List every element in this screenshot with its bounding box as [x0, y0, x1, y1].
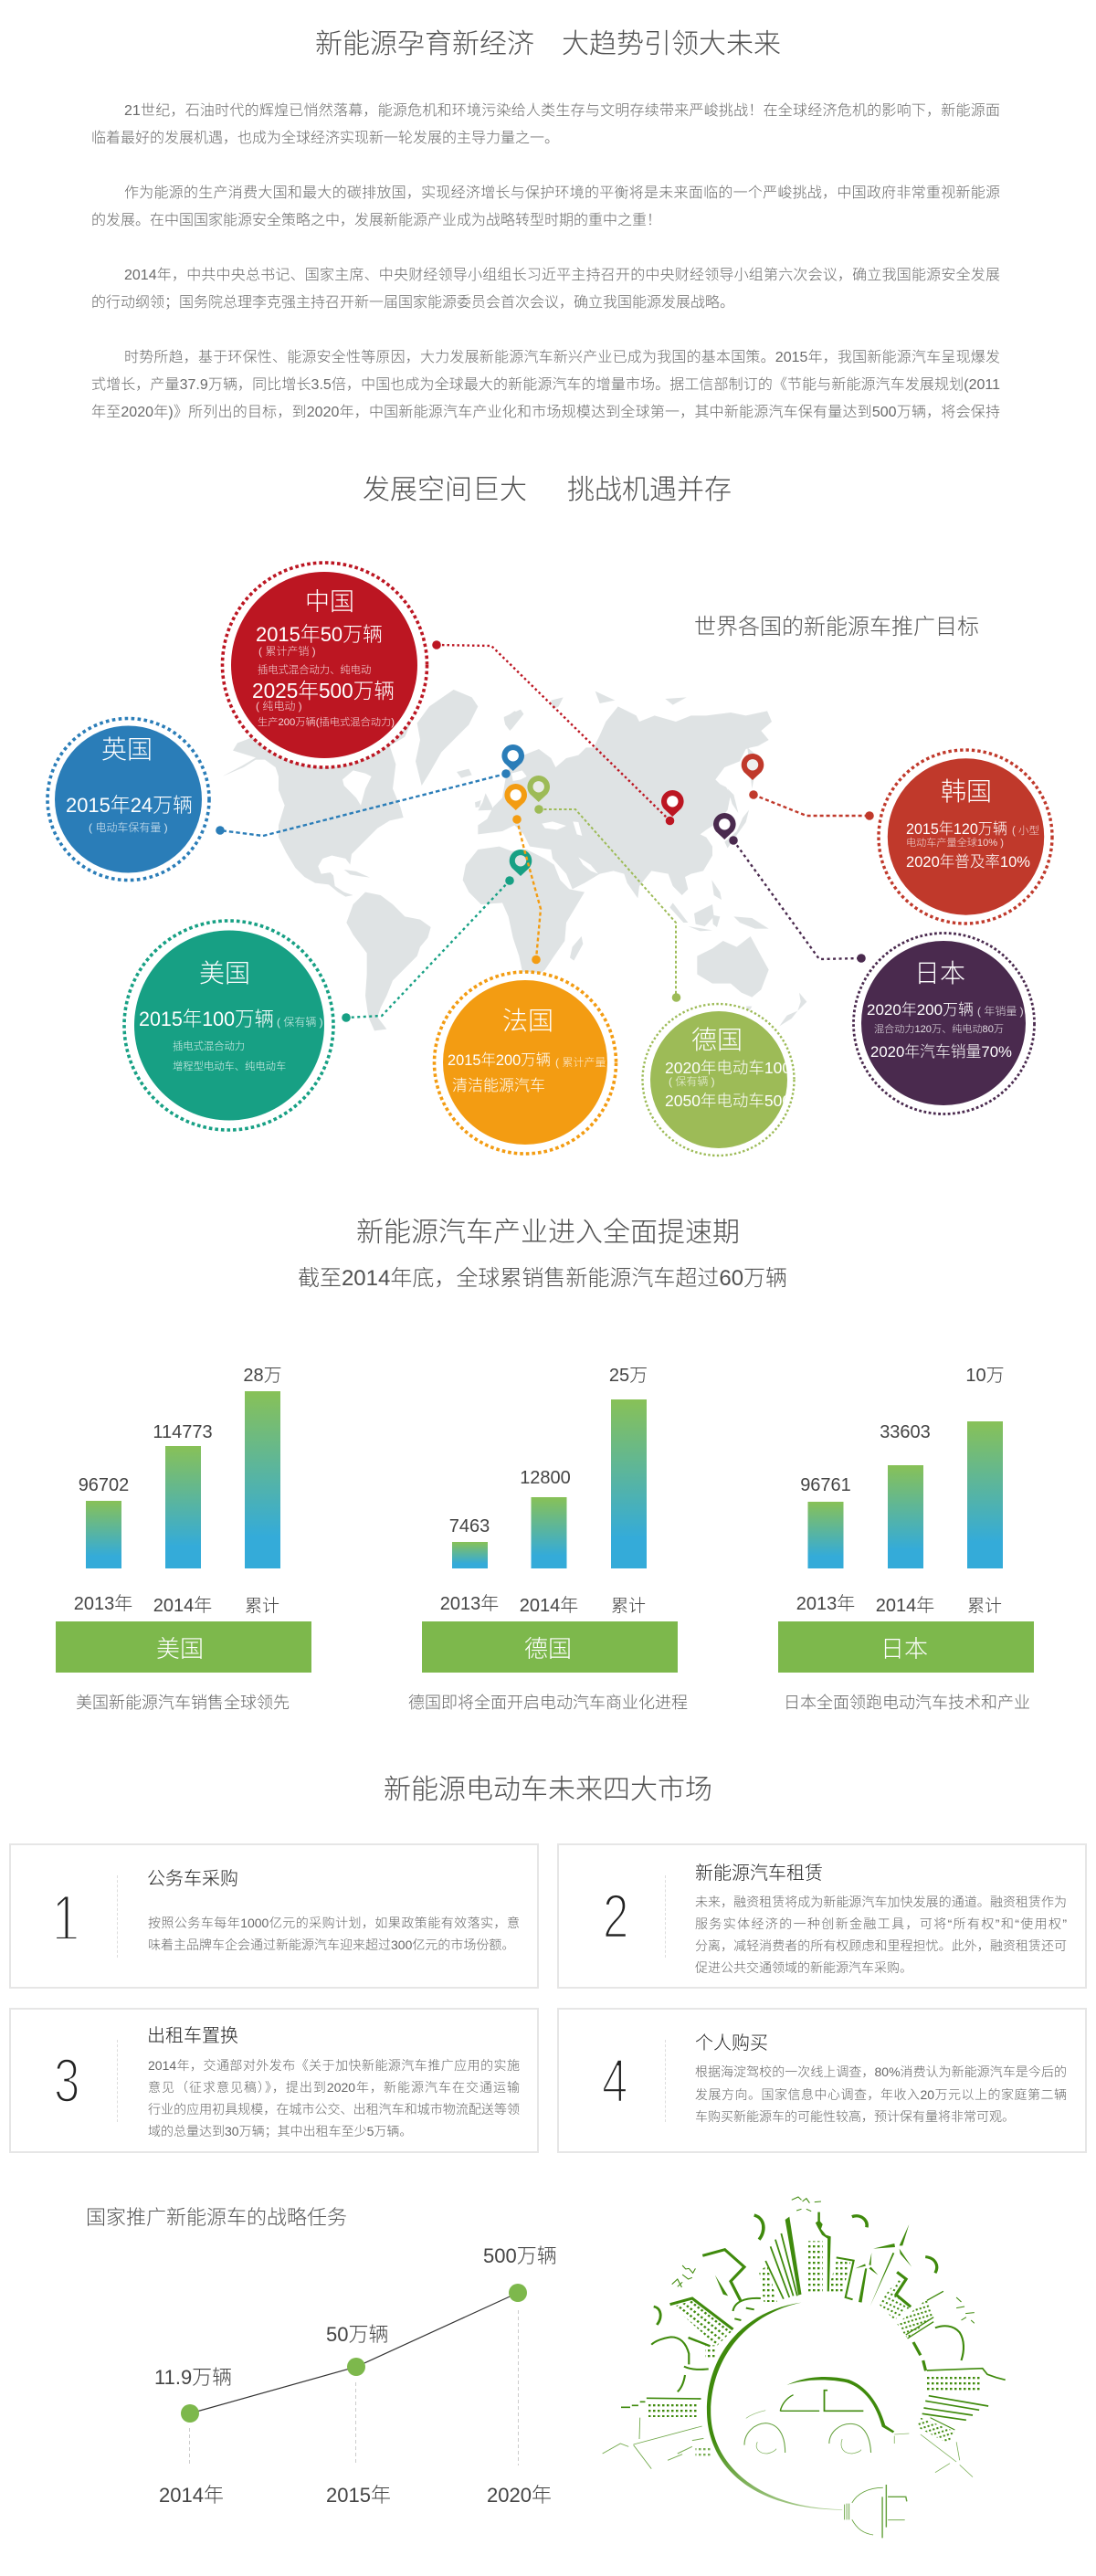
bar chart: USA: 2013年 — [74, 1593, 132, 1614]
number 4: 4 — [602, 2046, 627, 2116]
card title: 个人购买 — [695, 2033, 768, 2053]
connector: Korea — [749, 790, 874, 820]
bar chart: Germany — [440, 1366, 648, 1616]
circle: China: 插电式混合动力、纯电动 — [258, 664, 371, 676]
circle: France: 法国 — [502, 1007, 553, 1035]
bar chart: Germany: 12800 — [520, 1468, 571, 1488]
card 3 — [9, 2008, 539, 2153]
card text: 根据海淀驾校的一次线上调查，80%消费认为新能源汽车是今后的 — [695, 2064, 1067, 2079]
circle: China: ( 纯电动 ) — [256, 700, 302, 713]
pin: Germany — [527, 776, 550, 802]
intro text block: 的发展。在中国国家能源安全策略之中，发展新能源产业成为战略转型时期的重中之重！ — [91, 213, 661, 228]
pin: Korea — [742, 754, 764, 780]
circle: China: 中国 — [305, 588, 354, 616]
card title: 新能源汽车租赁 — [695, 1863, 823, 1884]
label bar: Germany: 德国 — [524, 1635, 572, 1663]
card text: 未来，融资租赁将成为新能源汽车加快发展的通道。融资租赁作为 — [695, 1895, 1067, 1909]
dotted tower — [897, 2291, 943, 2338]
map: Eurasia — [478, 706, 772, 898]
line chart: 50万辆 — [326, 2323, 388, 2346]
left turbine and buildings — [603, 2398, 711, 2469]
circle: UK: ( 电动车保有量 ) — [89, 821, 168, 834]
circle: France: 清洁能源汽车 — [452, 1077, 545, 1094]
top birds — [792, 2197, 821, 2212]
card 1 — [9, 1843, 539, 1989]
line chart — [154, 2244, 557, 2507]
card text: 发展方向。国家信息中心调查，年收入20万元以上的家庭第二辆 — [695, 2087, 1067, 2102]
circle: China — [223, 563, 427, 767]
plug — [845, 2485, 907, 2538]
circle: Korea: 2020年普及率10% — [906, 853, 1030, 871]
card text: 按照公务车每年1000亿元的采购计划，如果政策能有效落实，意 — [148, 1916, 520, 1930]
section heading: development space — [363, 475, 732, 505]
birds left — [672, 2265, 695, 2287]
circle: Germany: ( 保有辆 ) — [669, 1075, 715, 1088]
intro text block: 临着最好的发展机遇，也成为全球经济实现新一轮发展的主导力量之一。 — [91, 131, 559, 146]
circle: USA: 增程型电动车、纯电动车 — [173, 1061, 286, 1072]
circle: France — [435, 972, 616, 1154]
circle: Japan: 日本 — [914, 959, 965, 987]
card title: 出租车置换 — [147, 2026, 238, 2046]
bar chart: Japan: 2013年 — [796, 1593, 855, 1614]
card text: 2014年，交通部对外发布《关于加快新能源汽车推广应用的实施 — [148, 2058, 520, 2073]
intro text block: 年至2020年)》所列出的目标，到2020年，中国新能源汽车产业化和市场规模达到全球第一，其中新能源汽车保有量达到500万辆，将会保持 — [91, 405, 1000, 420]
intro text block: 21世纪，石油时代的辉煌已悄然落幕，能源危机和环境污染给人类生存与文明存续带来严峻挑战！在全球经济危机的影响下，新能源面 — [124, 103, 1000, 119]
circle: Korea — [879, 750, 1052, 924]
bar chart: Japan: 累计 — [967, 1596, 1002, 1616]
line chart: 2015年 — [326, 2484, 391, 2507]
bar chart: Germany: 累计 — [611, 1596, 646, 1616]
connector: UK — [216, 769, 511, 836]
circle: Korea: 电动车产量全球10% ) — [906, 836, 1004, 849]
label bar: Germany — [422, 1621, 678, 1673]
section heading: acceleration: 新能源汽车产业进入全面提速期 — [356, 1218, 740, 1248]
intro text block: 式增长，产量37.9万辆，同比增长3.5倍，中国也成为全球最大的新能源汽车的增量市场。据工信部制订的《节能与新能源汽车发展规划(2011 — [91, 377, 1000, 393]
bar chart: USA: 28万 — [243, 1366, 282, 1386]
circle: USA: 插电式混合动力 — [173, 1040, 245, 1052]
connector: China — [432, 640, 674, 825]
illustration: green city around electric car — [603, 2196, 1006, 2538]
circle: China: 2025年500万辆 — [252, 679, 395, 702]
right tree — [935, 2326, 964, 2360]
card text: 促进公共交通领域的新能源汽车采购。 — [695, 1960, 912, 1975]
right turbine — [921, 2434, 973, 2477]
bar chart: Japan: 96761 — [800, 1475, 851, 1495]
caption: Germany: 德国即将全面开启电动汽车商业化进程 — [408, 1694, 688, 1712]
chart title: 国家推广新能源车的战略任务 — [86, 2206, 347, 2229]
world map — [222, 690, 806, 1030]
intro text block: 时势所趋，基于环保性、能源安全性等原因，大力发展新能源汽车新兴产业已成为我国的基本国策。2015年，我国新能源汽车呈现爆发 — [124, 350, 1000, 365]
circle: Japan — [853, 934, 1034, 1114]
line chart: 11.9万辆 — [154, 2366, 232, 2389]
pin: USA — [510, 850, 532, 876]
intro text block: 的行动纲领；国务院总理李克强主持召开新一届国家能源委员会首次会议，确立我国能源发展战略。 — [91, 295, 734, 311]
number 3: 3 — [54, 2046, 79, 2116]
card text: 域的总量达到30万辆；其中出租车至少5万辆。 — [148, 2124, 412, 2138]
card 4 — [557, 2008, 1087, 2153]
connector: Japan — [729, 836, 866, 963]
section heading: development space: 挑战机遇并存 — [567, 475, 732, 505]
card text: 味着主品牌车企会通过新能源汽车迎来超过300亿元的市场份额。 — [148, 1937, 514, 1952]
upper left cloud — [754, 2215, 764, 2240]
map: Africa — [463, 847, 585, 979]
card text — [148, 2058, 520, 2138]
pin: UK — [501, 744, 524, 771]
circle: Japan: 2020年200万辆 — [867, 1001, 974, 1019]
building with square windows — [878, 2272, 911, 2320]
bar chart: USA: 96702 — [79, 1475, 129, 1495]
line chart section — [86, 2206, 557, 2507]
card text: 服务实体经济的一种创新金融工具，可将“所有权”和“使用权” — [695, 1916, 1067, 1931]
label bar: Japan — [778, 1621, 1034, 1673]
circle: Korea: 韩国 — [941, 777, 992, 806]
bar chart: USA — [74, 1366, 282, 1616]
card text: 分离，减轻消费者的所有权顾虑和里程担忧。此外，融资租赁还可 — [695, 1938, 1067, 1953]
circle: Germany — [641, 1003, 796, 1156]
bar chart: Japan: 2014年 — [876, 1595, 934, 1616]
pin: China — [661, 790, 684, 817]
card title: 公务车采购 — [147, 1869, 238, 1889]
electric car — [744, 2377, 909, 2454]
circle: UK: 英国 — [101, 735, 153, 764]
line chart: 2020年 — [487, 2484, 552, 2507]
bar charts section — [56, 1366, 1034, 1712]
intro text block: 作为能源的生产消费大国和最大的碳排放国，实现经济增长与保护环境的平衡将是未来面临的一个严峻挑战，中国政府非常重视新能源 — [124, 185, 1000, 201]
circle: France: ( 累计产量 ) — [555, 1056, 613, 1069]
right buildings — [917, 2369, 1006, 2444]
circle: Germany: 2050年电动车500万辆 — [665, 1092, 823, 1110]
card text: 车购买新能源车的可能性较高，预计保有量将非常可观。 — [695, 2109, 1015, 2124]
slanted dotted building — [670, 2298, 732, 2360]
connector: Germany — [534, 805, 680, 1002]
bar chart: Japan — [796, 1366, 1005, 1616]
circle: USA: ( 保有辆 ) — [277, 1016, 323, 1029]
circle: China: 生产200万辆(插电式混合动力) — [258, 716, 395, 728]
label bar: USA: 美国 — [156, 1635, 204, 1663]
caption: Japan: 日本全面领跑电动汽车技术和产业 — [784, 1694, 1030, 1712]
map subtitle: 世界各国的新能源车推广目标 — [694, 615, 979, 639]
bar chart: USA: 累计 — [245, 1596, 279, 1616]
bar chart: Germany: 7463 — [449, 1516, 490, 1536]
line chart: 2014年 — [159, 2484, 224, 2507]
L-shaped building and tree — [702, 2250, 761, 2320]
title: 新能源孕育新经济 大趋势引领大未来 — [315, 29, 781, 59]
right birds — [956, 2297, 975, 2323]
pin: Japan — [713, 813, 736, 839]
circle: France: 2015年200万辆 — [448, 1051, 551, 1069]
bar chart: USA: 2014年 — [153, 1595, 212, 1616]
central skyscrapers — [759, 2212, 854, 2302]
bar chart: USA: 114773 — [153, 1422, 213, 1442]
bar chart: Japan: 10万 — [965, 1366, 1005, 1386]
circle: Japan: 2020年汽车销量70% — [870, 1043, 1012, 1061]
circle: China: 2015年50万辆 — [256, 623, 383, 646]
card text — [695, 2064, 1067, 2124]
circle: Korea: 2015年120万辆 — [906, 820, 1007, 838]
map: Scandinavia and Britain — [475, 793, 493, 810]
circle: China: ( 累计产销 ) — [258, 645, 316, 658]
circle: UK — [47, 718, 209, 881]
map: Americas and Greenland — [222, 690, 523, 1030]
section subheading: 截至2014年底，全球累销售新能源汽车超过60万辆 — [298, 1266, 787, 1291]
left cloud — [654, 2307, 660, 2325]
circle: Japan: 混合动力120万、纯电动80万 — [874, 1023, 1004, 1035]
card text — [695, 1895, 1067, 1975]
intro text block — [91, 102, 1000, 420]
circle: Korea: ( 小型 — [1012, 825, 1039, 837]
card 2 — [557, 1843, 1087, 1989]
circle: Japan: ( 年销量 ) — [977, 1005, 1024, 1018]
circle: Germany: 德国 — [691, 1026, 743, 1054]
big arc and cord — [707, 2303, 842, 2510]
connector: France — [512, 815, 541, 964]
wind turbines — [855, 2224, 912, 2307]
left tree — [651, 2337, 709, 2391]
section heading: development space: 发展空间巨大 — [363, 475, 527, 505]
pin: France — [504, 784, 527, 810]
right clouds — [925, 2257, 937, 2273]
intro text block: 2014年，中共中央总书记、国家主席、中央财经领导小组组长习近平主持召开的中央财经领导小组第六次会议，确立我国能源安全发展 — [124, 268, 1000, 283]
bar chart: Germany: 2013年 — [440, 1593, 499, 1614]
map: Oceania and Asian islands — [504, 692, 806, 1026]
bar chart: Germany: 25万 — [609, 1366, 648, 1386]
card text — [148, 1916, 520, 1952]
card text: 行业的应用初具规模，在城市公交、出租汽车和城市物流配送等领 — [148, 2102, 520, 2117]
circle: UK: 2015年24万辆 — [66, 794, 193, 817]
label bar: Japan: 日本 — [880, 1635, 928, 1663]
circle: USA: 美国 — [199, 959, 250, 987]
circle: Germany: 2020年电动车100万辆 — [665, 1059, 823, 1077]
world map section — [46, 561, 1054, 1156]
circle: USA: 2015年100万辆 — [139, 1008, 274, 1030]
circle: USA — [124, 921, 333, 1130]
line chart: 500万辆 — [483, 2244, 557, 2267]
bar chart: Japan: 33603 — [880, 1422, 931, 1442]
number 2: 2 — [603, 1882, 628, 1951]
connector: USA — [342, 876, 514, 1022]
caption: USA: 美国新能源汽车销售全球领先 — [76, 1694, 290, 1712]
label bar: USA — [56, 1621, 311, 1673]
card text: 意见（征求意见稿）》，提出到2020年，新能源汽车在交通运输 — [148, 2080, 520, 2095]
top right cloud — [852, 2216, 867, 2227]
bar chart: Germany: 2014年 — [520, 1595, 578, 1616]
section heading: four markets: 新能源电动车未来四大市场 — [384, 1775, 712, 1805]
right arc fragments — [913, 2342, 926, 2370]
